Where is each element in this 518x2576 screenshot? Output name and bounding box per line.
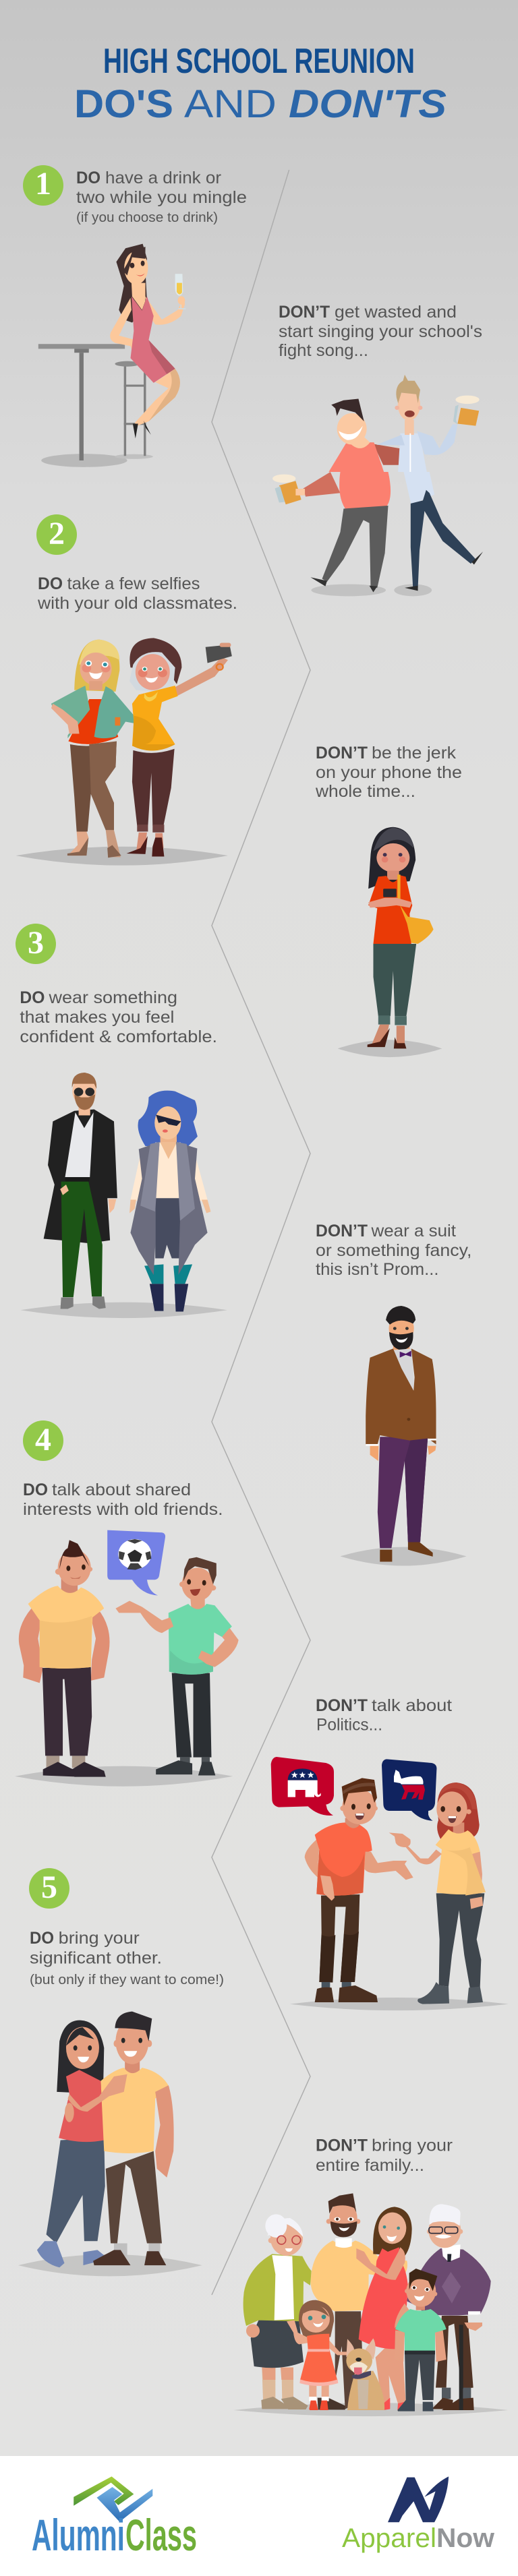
text: do 4: talk about shared: [52, 1480, 191, 1499]
text: do 1: two while you mingle: [76, 188, 247, 207]
logo: AlumniClass: Alumni: [32, 2510, 125, 2560]
illustration: overdressed man in a brown suit: [340, 1306, 467, 1566]
text: don't 4: DON’T: [316, 1696, 368, 1715]
number badge 2: [36, 514, 77, 555]
text: do 3: [20, 988, 217, 1046]
illustration: two drunk men with beer mugs: [272, 375, 483, 596]
text: do 1: [76, 169, 247, 225]
text: don't 1: get wasted and: [335, 303, 457, 322]
number badge 1: 1: [35, 166, 51, 202]
text: don't 2: on your phone the: [316, 763, 462, 782]
logo: ApparelNow: Now: [436, 2523, 495, 2553]
text: don't 3: or something fancy,: [316, 1241, 472, 1260]
text: don't 2: be the jerk: [372, 744, 457, 762]
text: do 5: DO: [30, 1929, 54, 1948]
text: do 3: that makes you feel: [20, 1008, 174, 1027]
number badge 3: [16, 924, 56, 964]
illustration: woman looking at her phone: [338, 827, 442, 1057]
text: do 3: confident & comfortable.: [20, 1027, 217, 1046]
text: don't 2: whole time...: [315, 782, 415, 801]
number badge 5: 5: [41, 1869, 57, 1905]
text: do 2: take a few selfies: [67, 574, 200, 593]
logo: ApparelNow: Apparel: [342, 2523, 436, 2553]
number badge 4: [23, 1420, 63, 1461]
text: do 5: (but only if they want to come!): [30, 1973, 224, 1987]
text: don't 5: [316, 2136, 453, 2175]
text: do 1: (if you choose to drink): [76, 210, 218, 225]
title: HIGH SCHOOL REUNION: [103, 42, 415, 81]
text: do 5: significant other.: [30, 1949, 162, 1968]
text: do 4: DO: [23, 1480, 48, 1499]
mother: [356, 2207, 412, 2410]
text: don't 2: [315, 744, 462, 801]
text: don't 1: [279, 303, 482, 360]
number badge 3: 3: [28, 925, 44, 961]
illustration: two women taking a selfie: [16, 638, 232, 866]
title: DON'TS: [289, 82, 447, 126]
illustration: entire family with dog: [234, 2193, 508, 2416]
grandmother: [243, 2214, 312, 2409]
illustration: woman with a drink at a bar table: [38, 244, 185, 467]
text: don't 1: fight song...: [279, 341, 368, 360]
text: don't 3: DON’T: [316, 1222, 368, 1240]
grandfather: [407, 2204, 491, 2410]
illustration: two friends talking about soccer: [15, 1530, 239, 1787]
text: do 2: DO: [38, 574, 63, 593]
speech bubble: democratic donkey: [382, 1759, 436, 1821]
text: do 4: interests with old friends.: [23, 1500, 223, 1519]
illustration: happy couple: [18, 2012, 202, 2276]
text: do 3: DO: [20, 988, 45, 1007]
text: don't 5: entire family...: [316, 2156, 424, 2175]
text: don't 1: DON’T: [279, 303, 330, 322]
text: do 2: with your old classmates.: [37, 594, 237, 613]
text: don't 4: Politics...: [316, 1715, 382, 1734]
text: don't 1: start singing your school's: [279, 322, 482, 341]
text: do 5: bring your: [59, 1929, 140, 1948]
text: do 1: DO: [76, 169, 100, 187]
illustration: man and woman arguing about politics: [271, 1757, 509, 2010]
text: don't 5: bring your: [372, 2136, 453, 2155]
boy: [395, 2269, 447, 2412]
number badge 1: [23, 165, 63, 206]
text: do 3: wear something: [48, 988, 177, 1007]
title: DO'S: [74, 82, 173, 126]
text: don't 3: wear a suit: [370, 1222, 456, 1240]
dog: [346, 2338, 384, 2410]
text: do 2: [37, 574, 237, 613]
number badge 4: 4: [35, 1422, 51, 1458]
number badge 5: [29, 1868, 69, 1909]
text: don't 2: DON’T: [316, 744, 368, 762]
text: don't 4: talk about: [372, 1696, 452, 1715]
girl: [287, 2300, 347, 2410]
text: don't 5: DON’T: [316, 2136, 368, 2155]
text: do 4: [23, 1480, 223, 1519]
title: AND: [184, 82, 277, 126]
number badge 2: 2: [49, 516, 65, 551]
logo: AlumniClass: Class: [125, 2510, 197, 2560]
father: [311, 2193, 407, 2409]
illustration: stylish man and woman in comfortable outfits: [20, 1073, 227, 1318]
text: don't 4: [316, 1696, 452, 1734]
logo: ApparelNow: [342, 2476, 495, 2553]
text: don't 3: this isn’t Prom...: [316, 1260, 438, 1279]
speech bubble: republican elephant: [271, 1757, 334, 1816]
text: do 5: [30, 1929, 224, 1987]
text: don't 3: [316, 1222, 472, 1279]
text: do 1: have a drink or: [105, 169, 221, 187]
logo: AlumniClass: [32, 2476, 197, 2560]
title: [74, 42, 447, 126]
